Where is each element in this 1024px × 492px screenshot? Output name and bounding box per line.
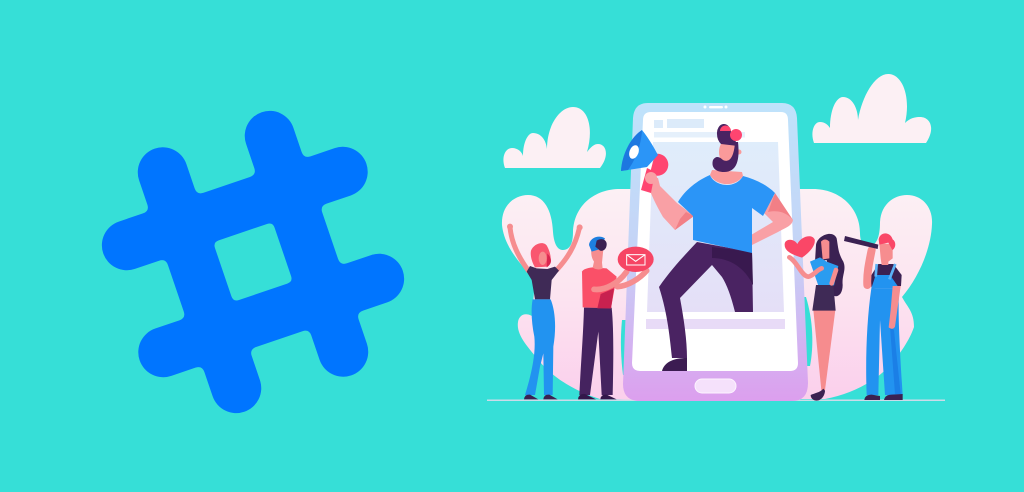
- face: [719, 139, 737, 165]
- icon: hashtag: [77, 86, 429, 438]
- shirt: [582, 267, 617, 308]
- hair: [815, 234, 844, 296]
- ground line: [487, 400, 945, 401]
- cloud left: [503, 107, 606, 168]
- shoes: [864, 394, 903, 400]
- phone: [623, 103, 808, 401]
- legs shadow: [890, 327, 901, 394]
- woman with heart: [785, 234, 844, 401]
- teal sliver right: [803, 297, 812, 366]
- shoes: [524, 395, 558, 399]
- man with telescope: [844, 233, 903, 400]
- pants shadow: [712, 247, 753, 285]
- head: [591, 249, 603, 269]
- jeans: [525, 299, 555, 395]
- bib: [871, 275, 899, 288]
- beard: [712, 142, 739, 172]
- envelope icon: [627, 255, 645, 265]
- caption bar: [646, 319, 785, 329]
- pants: [579, 308, 613, 395]
- red hair highlight: [720, 126, 742, 141]
- neck: [710, 170, 743, 184]
- hair: [589, 237, 605, 252]
- left arm: [867, 250, 872, 285]
- cloud right: [812, 74, 931, 143]
- hand: [645, 172, 657, 184]
- arm shadow: [675, 212, 694, 230]
- top: [527, 266, 559, 299]
- woman raising arms: [508, 225, 581, 399]
- shirt: [678, 175, 775, 253]
- face: [539, 252, 547, 265]
- hair shadow: [547, 253, 551, 267]
- ear: [736, 150, 742, 154]
- heart: [785, 236, 815, 258]
- speaker: [704, 106, 728, 108]
- shorts: [812, 285, 836, 311]
- shirt: [870, 264, 902, 288]
- hair: [717, 124, 738, 146]
- hair: [531, 243, 551, 267]
- head: [879, 243, 893, 265]
- phone screen: [632, 112, 798, 371]
- blob left: [502, 189, 650, 400]
- face: [821, 239, 829, 259]
- shirt shadow: [597, 288, 614, 308]
- arm shadow: [768, 193, 793, 220]
- right arm: [889, 286, 901, 329]
- home button: [695, 379, 736, 393]
- arms: [508, 225, 581, 271]
- legs overalls: [866, 288, 903, 395]
- hair dark: [595, 239, 607, 251]
- top: [810, 257, 838, 286]
- arm: [789, 257, 822, 277]
- hair: [879, 233, 895, 250]
- shoes: [578, 394, 617, 399]
- megaphone: [621, 130, 668, 193]
- straps: [876, 264, 895, 279]
- main man with megaphone: [621, 124, 793, 371]
- legs: [813, 310, 835, 390]
- phone body: [623, 103, 808, 401]
- arms: [594, 271, 647, 289]
- header bars: [654, 119, 745, 138]
- right arm: [743, 194, 793, 246]
- shoe: [811, 389, 825, 401]
- message bubble: [618, 247, 654, 272]
- telescope: [844, 236, 878, 249]
- teal sliver left: [621, 320, 630, 375]
- man with envelope: [578, 237, 654, 399]
- left arm: [645, 176, 694, 230]
- blob right: [790, 189, 932, 399]
- screen picture: [647, 142, 784, 312]
- pants: [659, 242, 753, 358]
- shoe: [662, 358, 687, 371]
